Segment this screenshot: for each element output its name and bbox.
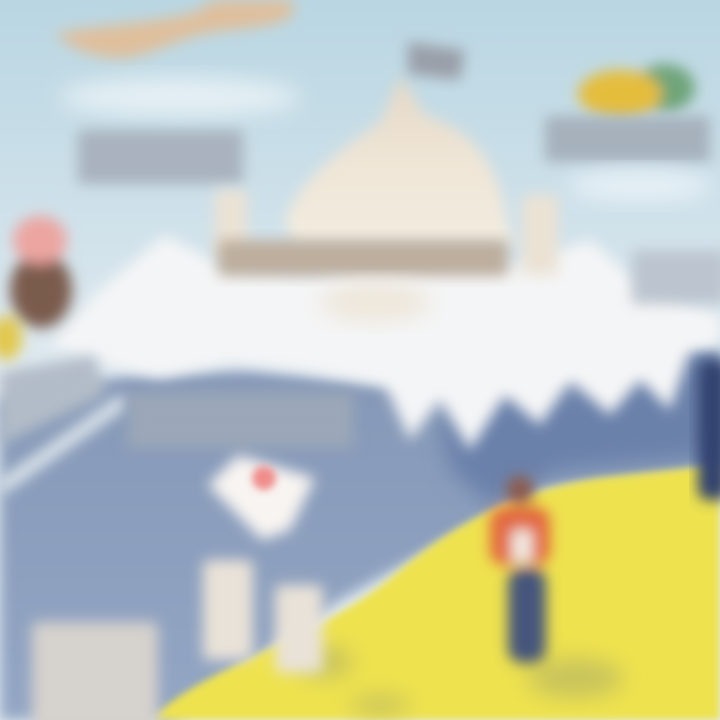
icon: airplane top left — [55, 0, 295, 58]
icon: heart badge — [208, 455, 315, 540]
icon: summit flag — [408, 42, 465, 80]
cloud right — [568, 170, 712, 202]
heart dot — [252, 466, 276, 490]
icon: coloured emblem top right — [578, 64, 695, 118]
text block: far right label — [632, 250, 720, 304]
path stripe — [0, 400, 125, 488]
snow under banner — [320, 282, 430, 322]
left panel — [0, 355, 105, 445]
character left with pink head — [0, 216, 72, 360]
summit peak — [285, 75, 515, 245]
title banner — [218, 240, 508, 276]
side towers — [215, 190, 558, 275]
figure: hiker — [490, 476, 550, 663]
text block: right label — [545, 116, 710, 162]
hill shadows — [297, 646, 623, 715]
text block: left label — [78, 130, 243, 184]
yellow hill — [150, 465, 720, 720]
figure: right edge person — [698, 360, 720, 500]
blue-grey mountain — [0, 350, 720, 720]
pillars — [203, 560, 323, 673]
central grey label — [128, 392, 353, 448]
bottom left box — [32, 622, 158, 720]
snow cap — [50, 235, 720, 450]
cloud top left — [60, 77, 300, 117]
darker ridge right — [440, 355, 720, 505]
